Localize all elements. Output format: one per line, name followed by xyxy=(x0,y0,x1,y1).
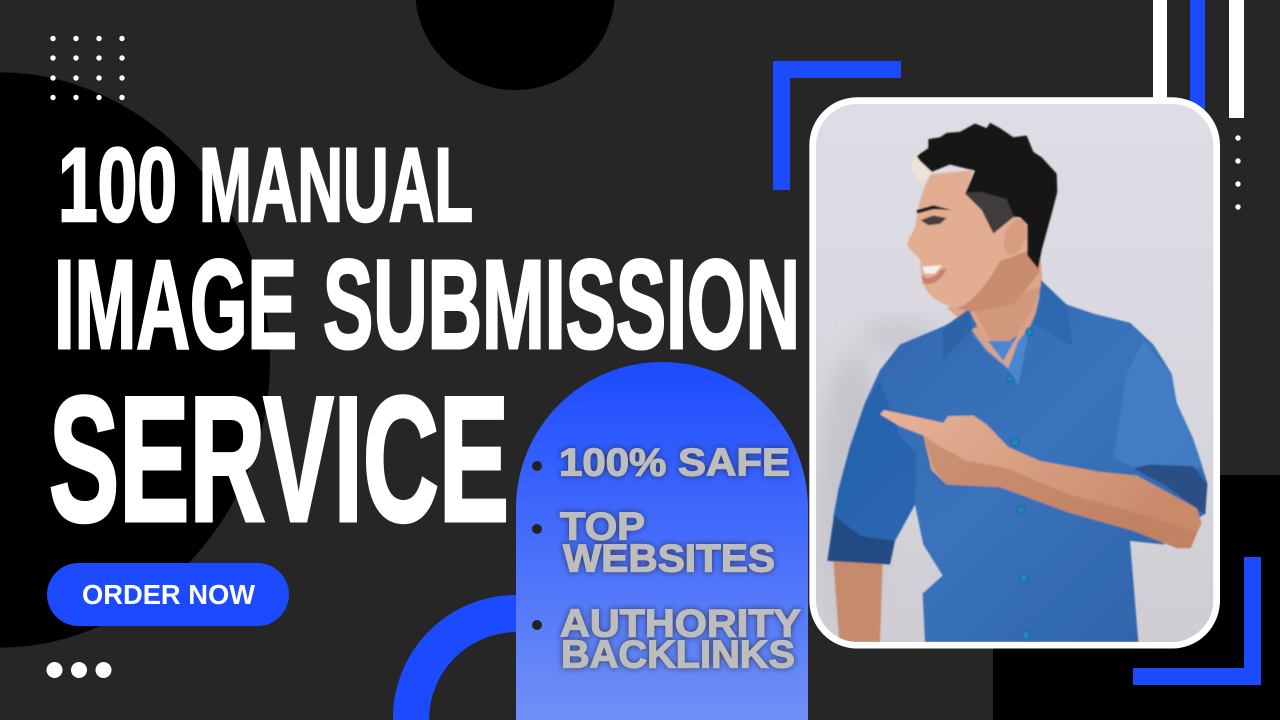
left lower arm xyxy=(833,559,883,642)
photo card xyxy=(809,97,1220,649)
ear xyxy=(1003,218,1027,255)
feature labels: AUTHORITY xyxy=(560,602,801,646)
title line 2: IMAGE xyxy=(54,234,297,375)
feature labels: BACKLINKS xyxy=(561,634,795,676)
feature labels: WEBSITES xyxy=(563,538,775,580)
card white frame xyxy=(809,97,1220,649)
sideburn stubble xyxy=(965,174,1030,234)
title line 1 xyxy=(58,127,473,244)
photo of man pointing xyxy=(816,104,1213,642)
blue arch panel xyxy=(516,362,808,720)
title line 1: 100 xyxy=(58,127,177,244)
right cuff xyxy=(1133,465,1207,515)
order now button: ORDER NOW xyxy=(82,579,256,610)
blue bracket top xyxy=(773,61,901,190)
eyebrow xyxy=(917,205,952,214)
mouth xyxy=(922,265,942,274)
title xyxy=(49,127,800,558)
feature list xyxy=(532,442,801,676)
hair xyxy=(917,123,1057,269)
collar left xyxy=(943,310,971,358)
sleeve shading xyxy=(833,381,917,541)
feature labels xyxy=(559,442,801,676)
left cuff xyxy=(827,515,895,565)
shirt buttons xyxy=(1007,328,1033,640)
collar right xyxy=(1030,280,1073,347)
feature labels: TOP xyxy=(560,506,645,548)
feature labels: 100% SAFE xyxy=(559,442,790,484)
blue bracket bottom right xyxy=(1133,557,1261,685)
bullet marks xyxy=(532,461,542,630)
top right vertical stripes xyxy=(1153,0,1244,118)
title line 2: SUBMISSION xyxy=(323,234,800,375)
order now button xyxy=(47,563,289,626)
decorative black block bottom right xyxy=(993,475,1280,720)
hair highlight xyxy=(910,152,932,185)
blue ring bottom xyxy=(393,595,516,720)
eye xyxy=(921,215,947,225)
shirt xyxy=(833,281,1207,642)
decorative black circle left xyxy=(0,72,270,648)
wall xyxy=(816,104,1213,642)
title line 2 xyxy=(54,234,800,375)
three white dots xyxy=(46,662,112,678)
title line 1: MANUAL xyxy=(199,127,473,244)
face xyxy=(908,170,1032,308)
decorative black circle top xyxy=(416,0,614,90)
forearm and hand xyxy=(880,410,1202,548)
neck xyxy=(947,246,1043,363)
dot column right xyxy=(1235,135,1241,210)
inner placket xyxy=(972,332,1028,384)
title line 3: SERVICE xyxy=(49,360,509,558)
dot grid top left xyxy=(50,36,125,100)
